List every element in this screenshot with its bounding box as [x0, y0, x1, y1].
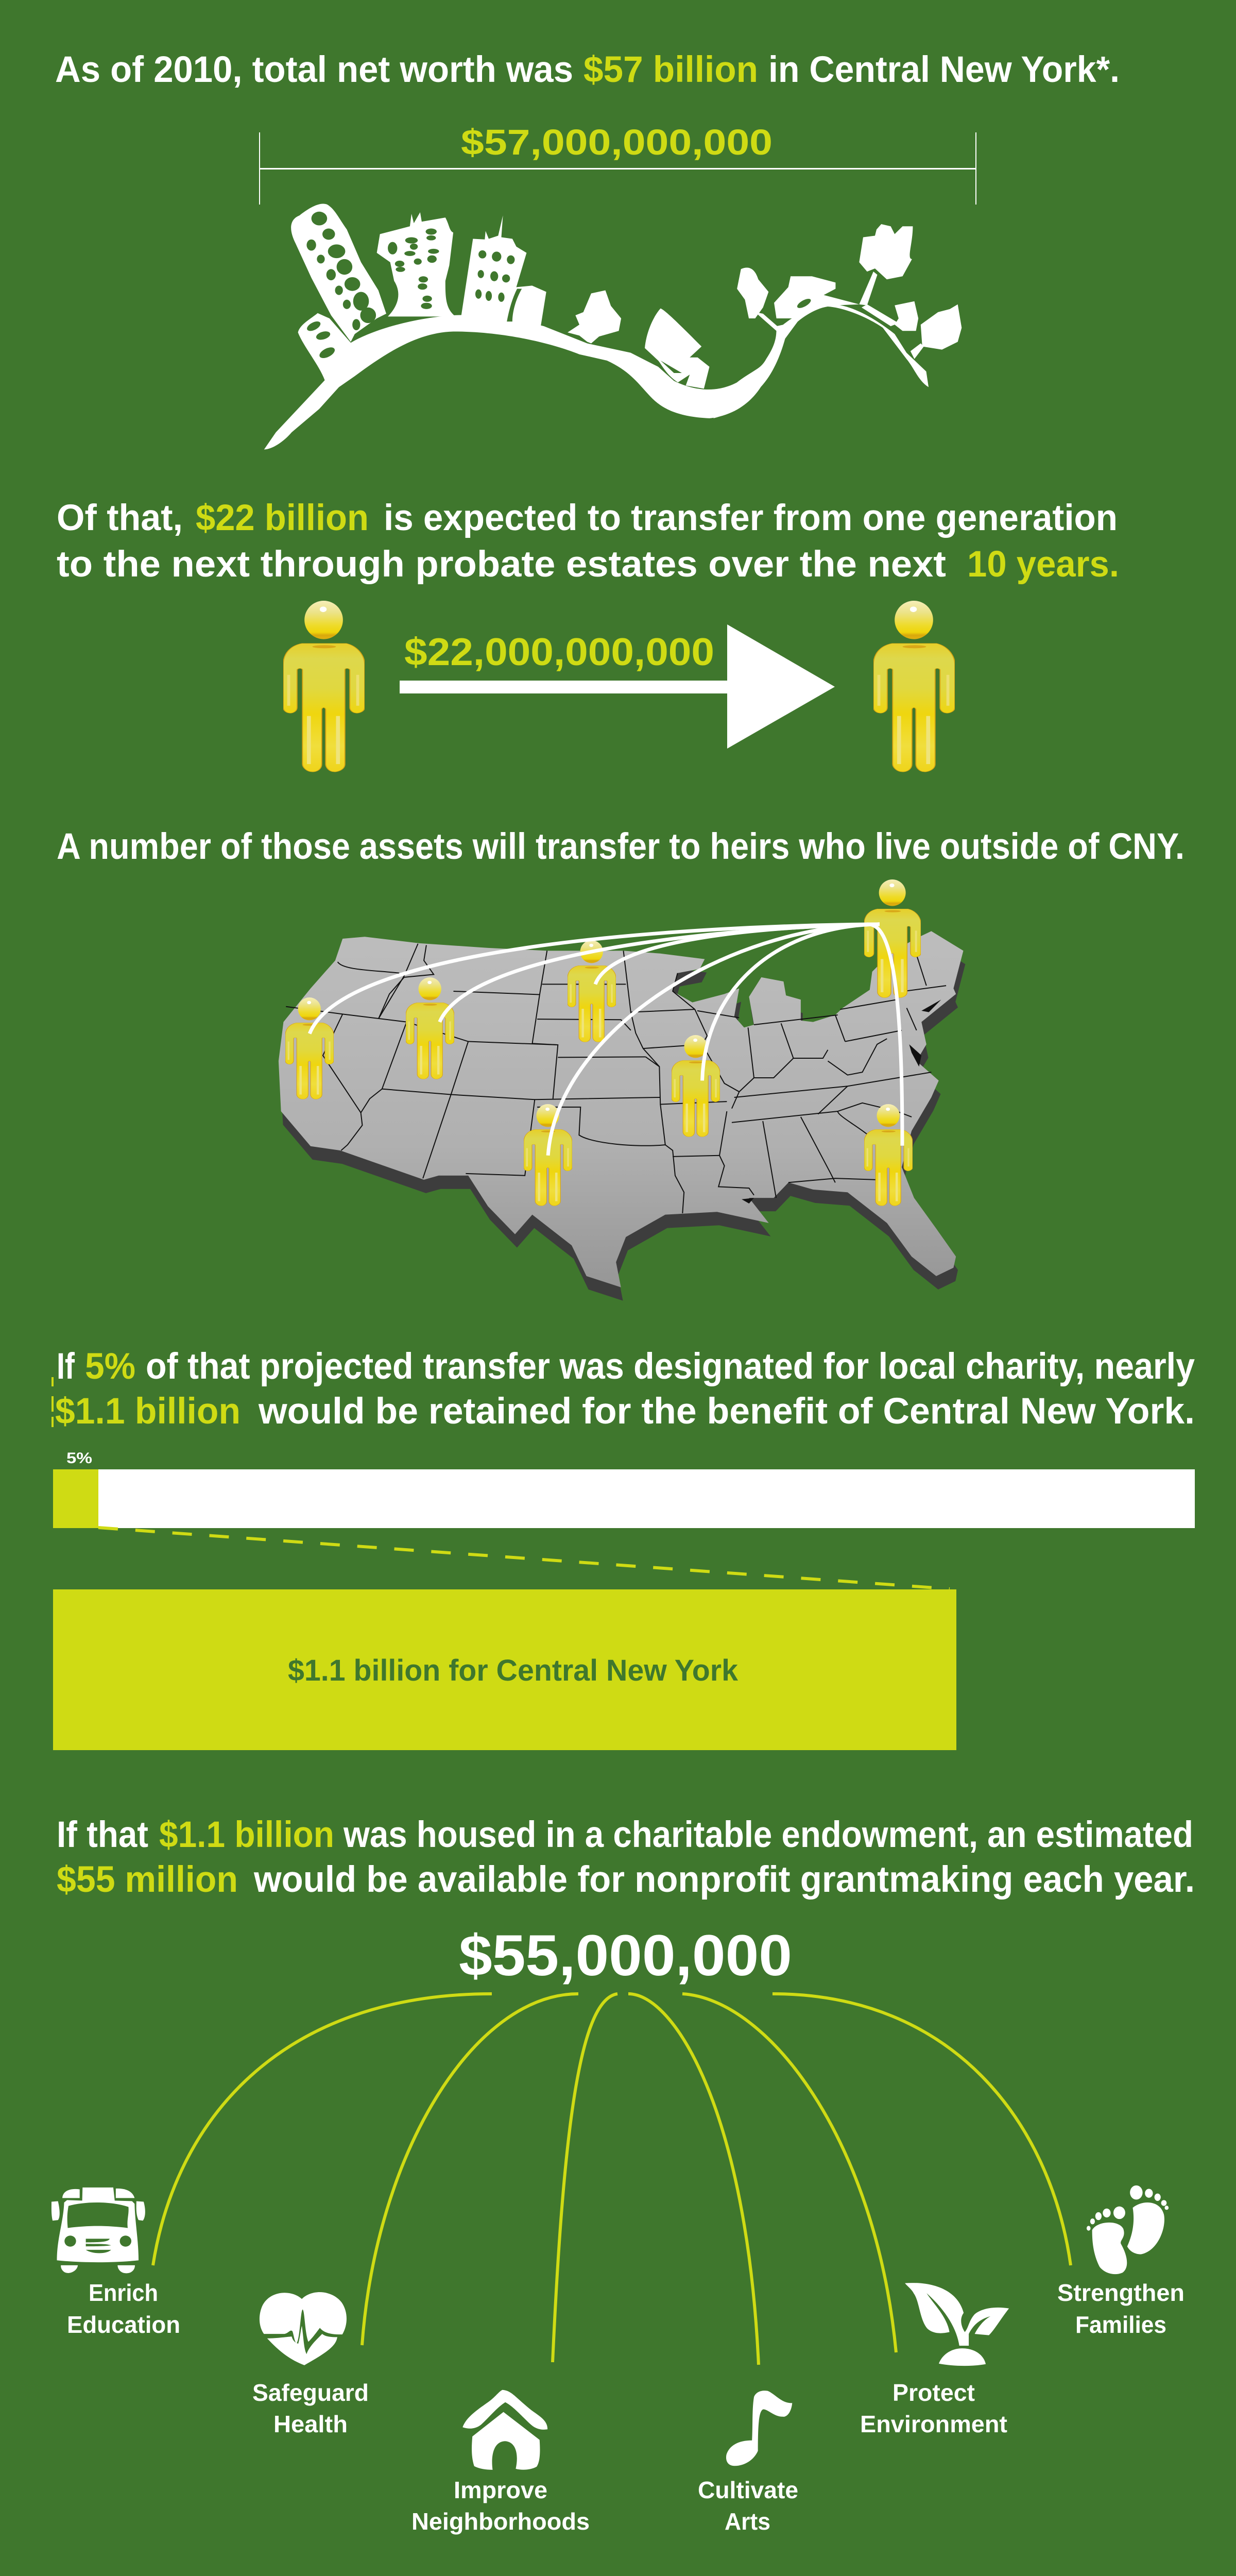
heading: 5 percent for charity: 5% — [85, 1346, 135, 1387]
dimension bracket: $57,000,000,000: $57,000,000,000 — [461, 122, 772, 162]
icon: heart with pulse — [260, 2292, 347, 2365]
bar: 5 percent share — [53, 1450, 1195, 1528]
heading: probate transfer: is expected to transfer from one generation — [384, 498, 1118, 538]
heading: probate transfer: $22 billion — [196, 498, 369, 538]
label: Improve Neighborhoods: Neighborhoods — [411, 2508, 590, 2535]
heading: probate transfer — [57, 498, 1119, 585]
heading: endowment: $1.1 billion — [159, 1815, 334, 1855]
block: $1.1 billion for Central New York — [53, 1589, 956, 1750]
heading: 5 percent for charity — [52, 1346, 1195, 1432]
map: United States with heirs — [279, 879, 965, 1301]
label: Cultivate Arts: Cultivate — [698, 2477, 798, 2503]
heading: endowment: $55 million — [57, 1859, 238, 1900]
label: Protect Environment: Protect — [892, 2379, 975, 2406]
figure: $22,000,000,000 amount: $22,000,000,000 — [404, 630, 714, 673]
label: Strengthen Families — [1057, 2279, 1184, 2338]
arcs: grant distribution — [153, 1994, 1071, 2365]
label: Protect Environment: Environment — [860, 2411, 1007, 2437]
icon: giving person — [283, 601, 365, 772]
figure: $55,000,000: $55,000,000 — [459, 1923, 792, 1988]
arrow: transfer — [400, 624, 835, 749]
icon: school bus — [52, 2188, 145, 2273]
connector: dashed expansion line — [98, 1528, 950, 1589]
icon: house — [462, 2390, 547, 2470]
heading: probate transfer: to the next through probate estates over the next — [57, 544, 946, 585]
label: Cultivate Arts — [698, 2477, 798, 2535]
heading: 5 percent for charity: If — [57, 1346, 75, 1387]
label: Strengthen Families: Strengthen — [1057, 2279, 1184, 2306]
label: Safeguard Health: Safeguard — [252, 2379, 369, 2406]
heir figures on the map — [285, 879, 921, 1206]
bar: 5 percent share: 5% — [66, 1450, 92, 1467]
heading: 5 percent for charity: of that projected transfer was designated for local charity, nearly — [146, 1346, 1195, 1387]
heading: net worth — [55, 49, 1120, 90]
icon: sprout — [905, 2283, 1009, 2366]
heading: 5 percent for charity: $1.1 billion — [55, 1391, 241, 1432]
heading: probate transfer: 10 years. — [967, 544, 1119, 585]
illustration: city to nature silhouette — [264, 204, 962, 449]
icon: footprints — [1087, 2185, 1169, 2274]
transfer curves — [310, 924, 902, 1156]
block: $1.1 billion for Central New York: $1.1 billion for Central New York — [288, 1654, 739, 1687]
heading: 5 percent for charity: would be retained for the benefit of Central New York. — [258, 1391, 1195, 1432]
icon: music note — [726, 2391, 792, 2466]
heading: net worth: As of 2010, total net worth was — [55, 49, 573, 90]
heading: endowment — [57, 1815, 1195, 1900]
label: Safeguard Health — [252, 2379, 369, 2437]
label: Safeguard Health: Health — [273, 2411, 348, 2437]
label: Enrich Education: Education — [67, 2311, 180, 2338]
map surface — [279, 931, 965, 1301]
label: Improve Neighborhoods — [411, 2477, 590, 2535]
heading: net worth: in Central New York*. — [768, 49, 1120, 90]
heading: net worth: $57 billion — [583, 49, 758, 90]
label: Improve Neighborhoods: Improve — [454, 2477, 547, 2503]
icon: receiving person — [873, 601, 955, 772]
heading: probate transfer: Of that, — [57, 498, 183, 538]
heading: endowment: would be available for nonprofit grantmaking each year. — [253, 1859, 1195, 1900]
dimension bracket: $57,000,000,000 — [259, 122, 976, 205]
heading: endowment: If that — [57, 1815, 148, 1855]
label: Enrich Education — [67, 2279, 180, 2338]
label: Protect Environment — [860, 2379, 1007, 2437]
label: Enrich Education: Enrich — [89, 2279, 158, 2306]
label: Strengthen Families: Families — [1075, 2311, 1166, 2338]
label: Cultivate Arts: Arts — [725, 2508, 770, 2535]
